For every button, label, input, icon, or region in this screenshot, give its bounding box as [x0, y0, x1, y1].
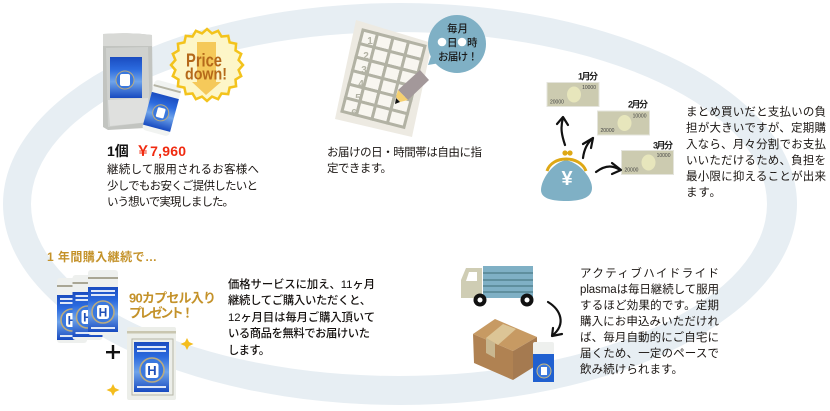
text block: installment payment: ます。 — [686, 186, 721, 199]
icon: price down badge: down! — [185, 64, 227, 84]
text block: installment payment: 入なら、月々分割でお支払 — [686, 137, 826, 151]
icon: calendar sheet: 3 — [361, 65, 367, 76]
text block: installment payment: まとめ買いだと支払いの負 — [686, 104, 826, 118]
price heading — [107, 143, 186, 159]
text block: installment payment: 最小限に抑えることが出来 — [686, 169, 826, 183]
text block: regular delivery: アクティブハイドライド — [580, 266, 719, 280]
text block: regular delivery: 飲み続けられます。 — [580, 362, 683, 376]
text block: price description: 少しでもお安くご提供したいと — [107, 178, 258, 192]
icon: sparkles — [106, 338, 194, 396]
icon: price down badge: Price — [186, 50, 222, 70]
text block: free gift — [228, 277, 375, 357]
text block: delivery date — [327, 145, 482, 175]
text block: regular delivery: plasmaは毎日継続して服用 — [580, 282, 719, 296]
text block: delivery date: お届けの日・時間帯は自由に指 — [327, 145, 482, 159]
text block: installment payment: 担が大きいですが、定期購 — [686, 120, 826, 134]
callout: delivery bubble: お届け！ — [438, 51, 478, 63]
icon: calendar sheet: 2 — [363, 51, 369, 62]
text block: free gift: 継続してご購入いただくと、 — [228, 293, 371, 307]
icon: three bottles — [57, 270, 118, 343]
heading: one year purchase: 1 年間購入継続で… — [47, 249, 157, 264]
icon: calendar sheet — [335, 20, 432, 137]
callout: delivery bubble: 毎月 — [447, 22, 468, 35]
heading: 90 capsule gift: 90カプセル入り — [129, 290, 216, 306]
text block: free gift: します。 — [228, 344, 270, 357]
icon: calendar sheet: 6 — [351, 108, 357, 119]
callout: delivery bubble — [428, 15, 486, 73]
icon: cardboard box — [473, 319, 537, 380]
plus sign — [106, 345, 120, 359]
heading: 90 capsule gift — [129, 290, 216, 320]
price heading: ￥7,960 — [136, 143, 186, 159]
icon: banknotes with month labels — [547, 70, 674, 174]
text block: free gift: いる商品を無料でお届けいた — [228, 326, 370, 340]
text block: regular delivery: 届くため、一定のペースで — [580, 347, 719, 360]
icon: purse with yen: ¥ — [561, 168, 573, 190]
callout: delivery bubble: 日 — [447, 37, 458, 49]
icon: silver pouch product — [103, 33, 153, 130]
text block: regular delivery — [580, 266, 720, 376]
icon: refill pouch — [127, 327, 176, 400]
icon: purse with yen — [541, 150, 592, 201]
heading: 90 capsule gift: プレゼント！ — [129, 306, 194, 320]
text block: price description — [107, 162, 259, 208]
text block: installment payment — [686, 104, 826, 199]
icon: pencil — [395, 70, 429, 104]
text block: regular delivery: 購入にお申込みいただけれ — [580, 314, 720, 328]
icon: banknotes with month labels: 3月分 — [653, 140, 673, 150]
text block: free gift: 価格サービスに加え、11ヶ月 — [228, 277, 375, 291]
price heading: 1個 — [107, 143, 129, 159]
text block: free gift: 12ヶ月目は毎月ご購入頂いて — [228, 310, 375, 324]
text block: price description: 継続して服用されるお客様へ — [107, 162, 259, 176]
arrows from purse — [557, 117, 621, 174]
text block: regular delivery: ば、毎月自動的にご自宅に — [580, 330, 719, 344]
icon: delivery truck — [461, 266, 534, 306]
text block: regular delivery: するほど効果的です。定期 — [580, 298, 719, 312]
icon: small bottle — [533, 342, 554, 383]
icon: banknotes with month labels: 1月分 — [578, 70, 598, 82]
callout: delivery bubble: 時 — [467, 36, 478, 49]
icon: calendar sheet: 1 — [367, 36, 373, 47]
icon: calendar sheet: 4 — [358, 79, 364, 90]
text block: delivery date: 定できます。 — [327, 162, 392, 175]
icon: price down badge — [171, 29, 243, 101]
icon: banknotes with month labels: 2月分 — [628, 98, 648, 110]
text block: installment payment: いいただけるため、負担を — [686, 153, 826, 167]
icon: calendar sheet: 5 — [355, 93, 361, 104]
text block: price description: いう想いで実現しました。 — [107, 194, 234, 208]
arrow: truck to box — [548, 302, 562, 336]
icon: white bottle — [142, 79, 182, 137]
icon: refill pouch: H — [147, 363, 157, 378]
